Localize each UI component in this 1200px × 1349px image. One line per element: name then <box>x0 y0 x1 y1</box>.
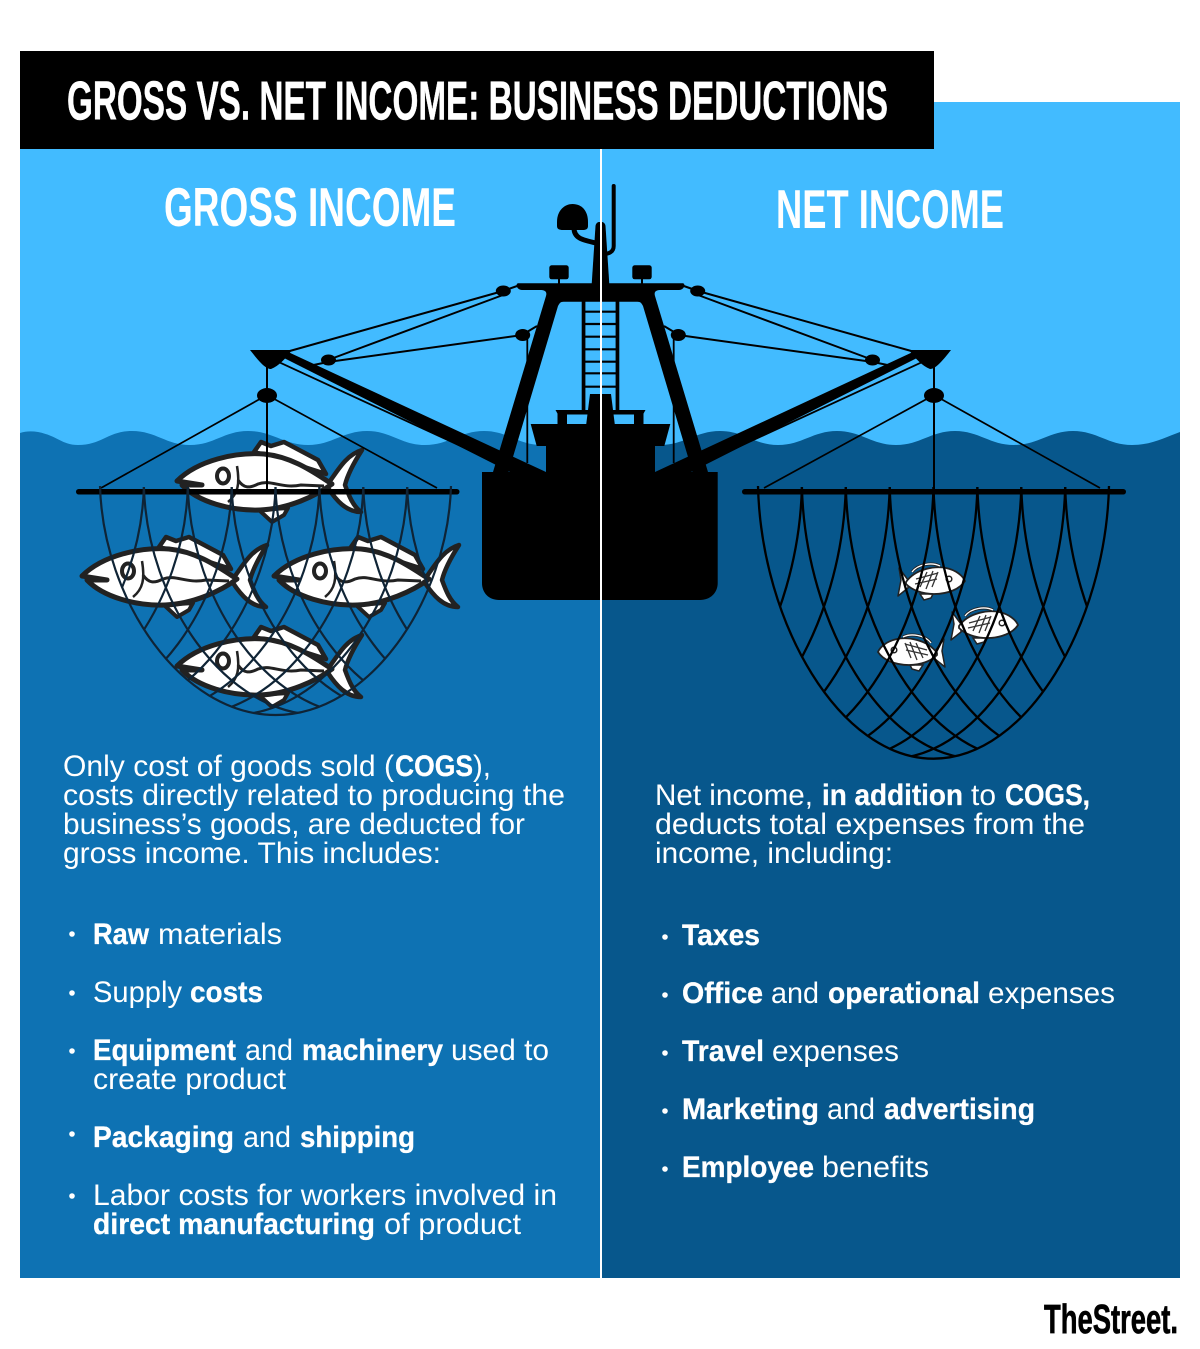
text block: net income description: income, including: <box>655 837 893 870</box>
list: net income deductions <box>662 919 1115 1184</box>
list: net income deductions: Office <box>682 977 763 1010</box>
list: gross income deductions: costs <box>190 976 263 1009</box>
net income net <box>742 486 1126 760</box>
list: net income deductions: and <box>771 977 819 1010</box>
center divider <box>600 149 602 1278</box>
title bar <box>20 51 934 149</box>
list: gross income deductions: create product <box>93 1063 287 1096</box>
text block: net income description: deducts total expenses from the <box>655 808 1085 841</box>
panel: net income water <box>600 431 1180 1278</box>
list: net income deductions: benefits <box>822 1151 929 1184</box>
list: gross income deductions: and <box>245 1034 293 1067</box>
list: net income deductions: Taxes <box>682 919 760 952</box>
list: gross income deductions: shipping <box>300 1121 415 1154</box>
list: gross income deductions: Equipment <box>93 1034 236 1067</box>
text block: gross income description: gross income. This includes: <box>63 837 441 870</box>
list: gross income deductions: of product <box>384 1208 522 1241</box>
heading: net income: NET INCOME <box>776 178 1004 240</box>
list: gross income deductions: Raw <box>93 918 150 951</box>
text block: gross income description: ), <box>473 750 491 783</box>
text block: gross income description: Only cost of goods sold ( <box>63 750 394 783</box>
list: gross income deductions: Packaging <box>93 1121 234 1154</box>
text block: net income description: in addition <box>822 779 963 812</box>
list: net income deductions: Marketing <box>682 1093 819 1126</box>
list: gross income deductions: and <box>243 1121 291 1154</box>
list: net income deductions: expenses <box>772 1035 899 1068</box>
list: net income deductions: and <box>827 1093 875 1126</box>
list: gross income deductions: machinery <box>302 1034 443 1067</box>
list: net income deductions: expenses <box>988 977 1115 1010</box>
gross income net <box>0 486 583 715</box>
list: gross income deductions: materials <box>158 918 282 951</box>
list: net income deductions: Travel <box>682 1035 764 1068</box>
heading: gross income: GROSS INCOME <box>164 176 456 238</box>
panel: sky background <box>20 102 1180 462</box>
text block: gross income description: business’s goods, are deducted for <box>63 808 525 841</box>
fish: net income catch <box>878 564 1018 671</box>
text block: net income description: Net income, <box>655 779 813 812</box>
list: net income deductions: advertising <box>884 1093 1035 1126</box>
list: gross income deductions <box>69 918 557 1241</box>
text block: gross income description: COGS <box>395 750 473 783</box>
ship and rigging <box>101 186 1100 600</box>
text block: net income description: COGS, <box>1005 779 1090 812</box>
list: gross income deductions: Supply <box>93 976 182 1009</box>
fish: gross income catch <box>82 442 459 707</box>
list: gross income deductions: direct manufacturing <box>93 1208 375 1241</box>
text block: net income description <box>655 779 1090 870</box>
list: gross income deductions: used to <box>451 1034 549 1067</box>
text block: gross income description: costs directly related to producing the <box>63 779 565 812</box>
text block: net income description: to <box>971 779 996 812</box>
list: net income deductions: operational <box>828 977 980 1010</box>
list: gross income deductions: Labor costs for workers involved in <box>93 1179 557 1212</box>
list: net income deductions: Employee <box>682 1151 814 1184</box>
text block: gross income description <box>63 750 565 870</box>
panel: gross income water <box>20 431 600 1278</box>
